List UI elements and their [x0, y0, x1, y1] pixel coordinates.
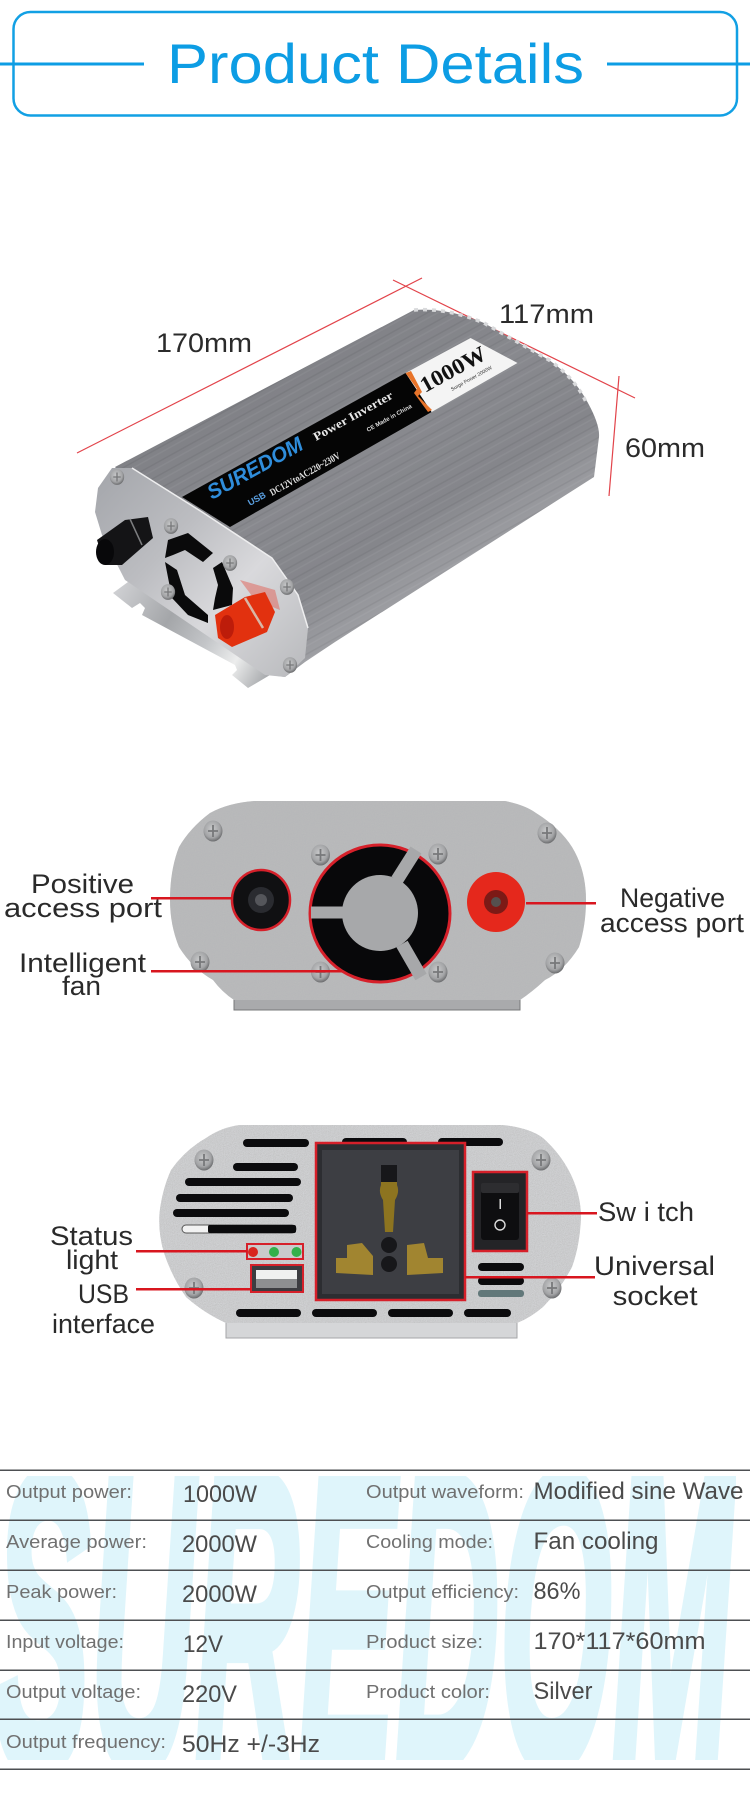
positive port — [232, 870, 290, 930]
row: output power: Output waveform: — [366, 1481, 524, 1502]
label text: Power Inverter: Power Inverter — [311, 388, 396, 444]
row: average power: Cooling mode: — [366, 1531, 493, 1552]
rear panel plate — [159, 1125, 581, 1323]
row: output voltage — [6, 1678, 593, 1708]
rear panel bracket — [226, 1318, 517, 1338]
row: output power: 1000W — [183, 1481, 257, 1508]
universal socket — [316, 1143, 465, 1300]
row: output frequency: Output frequency: — [6, 1731, 166, 1752]
callout: Negative access port: Negative — [620, 883, 725, 913]
row: peak power: 2000W — [182, 1581, 257, 1608]
row: input voltage: 12V — [183, 1631, 223, 1658]
row: output voltage: Output voltage: — [6, 1681, 141, 1702]
dimension: 60mm: 60mm — [625, 433, 705, 463]
leader lines — [151, 897, 596, 972]
dimension lines — [77, 278, 635, 496]
ventilation slots — [173, 1138, 524, 1317]
plate edge highlight — [132, 468, 308, 628]
row: average power: 2000W — [182, 1531, 257, 1558]
left pin contact — [336, 1243, 373, 1275]
callout: Intelligent fan — [19, 948, 147, 1001]
row: average power: Average power: — [6, 1531, 147, 1552]
front panel view — [4, 801, 745, 1010]
front panel plate — [170, 801, 586, 1000]
callout: Status light: light — [66, 1245, 119, 1275]
status lights — [247, 1244, 303, 1259]
body edge highlight — [414, 310, 586, 402]
row: average power: Fan cooling — [534, 1528, 658, 1555]
label text: 1000W: 1000W — [415, 341, 490, 397]
callout: Universal socket — [594, 1251, 715, 1311]
label text: USB: USB — [246, 490, 268, 508]
row: average power — [6, 1528, 658, 1558]
row: peak power: Peak power: — [6, 1581, 117, 1602]
fan opening — [165, 533, 233, 623]
label text: certification: CE Made in China — [366, 404, 414, 434]
specification table — [0, 1470, 750, 1770]
callout: Positive access port: Positive — [31, 869, 134, 899]
row: peak power: 86% — [534, 1578, 580, 1605]
callout: Universal socket: socket — [613, 1281, 698, 1311]
callout: Universal socket: Universal — [594, 1251, 715, 1281]
front plate — [95, 468, 308, 677]
negative port — [467, 872, 525, 932]
label text: voltage: DC12VtoAC220~230V — [268, 450, 343, 499]
row: output power: Modified sine Wave — [534, 1478, 744, 1505]
mounting bracket — [113, 582, 285, 688]
row: output frequency — [6, 1731, 320, 1758]
inverter photo with dimensions — [77, 278, 705, 688]
body ribs — [115, 310, 599, 677]
fan opening with red outline — [310, 845, 450, 982]
row: input voltage: Product size: — [366, 1631, 483, 1652]
row: input voltage: Input voltage: — [6, 1631, 124, 1652]
right pin contact — [407, 1243, 443, 1275]
header frame — [14, 12, 737, 116]
title: Product Details — [167, 32, 584, 95]
callout: Positive access port: access port — [4, 893, 163, 923]
callout: USB interface: USB — [78, 1279, 129, 1309]
row: peak power — [6, 1578, 580, 1608]
row: input voltage — [6, 1628, 706, 1658]
rocker switch — [473, 1172, 527, 1251]
callout: Switch: Sw i tch — [598, 1197, 694, 1227]
callout: USB interface — [52, 1279, 155, 1339]
USB port — [251, 1265, 303, 1292]
header: Product Details — [0, 12, 750, 116]
rear leader lines — [136, 1212, 597, 1290]
callout: Intelligent fan: Intelligent — [19, 948, 147, 978]
socket holes — [381, 1237, 397, 1253]
front panel bracket — [234, 998, 520, 1010]
rear panel screws — [184, 1150, 562, 1298]
header right rule — [607, 62, 750, 66]
row: peak power: Output efficiency: — [366, 1581, 519, 1602]
red terminal — [215, 580, 280, 647]
orange lightning accent — [406, 371, 432, 412]
row: output frequency: 50Hz +/-3Hz — [182, 1731, 320, 1758]
row: output voltage: Silver — [534, 1678, 593, 1705]
callout: Status light — [50, 1221, 133, 1275]
front panel screws — [190, 820, 564, 982]
callout: Positive access port — [4, 869, 163, 923]
row: output voltage: Product color: — [366, 1681, 490, 1702]
aluminium body — [115, 310, 599, 677]
black terminal — [96, 517, 153, 565]
row: input voltage: 170*117*60mm — [534, 1628, 706, 1655]
callout: Intelligent fan: fan — [62, 971, 101, 1001]
black label strip — [182, 373, 432, 527]
row: output voltage: 220V — [182, 1681, 237, 1708]
table rules — [0, 1470, 750, 1770]
white power label — [406, 338, 518, 412]
label text: SUREDOM: SUREDOM — [203, 433, 308, 504]
callout: Negative access port: access port — [600, 908, 745, 938]
callout: Negative access port — [600, 883, 745, 938]
row: output power — [6, 1478, 744, 1508]
rear panel view — [50, 1125, 715, 1339]
dimension: 170mm: 170mm — [156, 328, 252, 358]
label text: surge power: Surge Power 2000W — [450, 365, 494, 393]
header left rule — [0, 62, 144, 66]
callout: USB interface: interface — [52, 1309, 155, 1339]
dimension: 117mm: 117mm — [499, 299, 594, 329]
earth pin slot — [380, 1165, 398, 1232]
callout: Status light: Status — [50, 1221, 133, 1251]
screws — [110, 469, 297, 673]
row: output power: Output power: — [6, 1481, 132, 1502]
